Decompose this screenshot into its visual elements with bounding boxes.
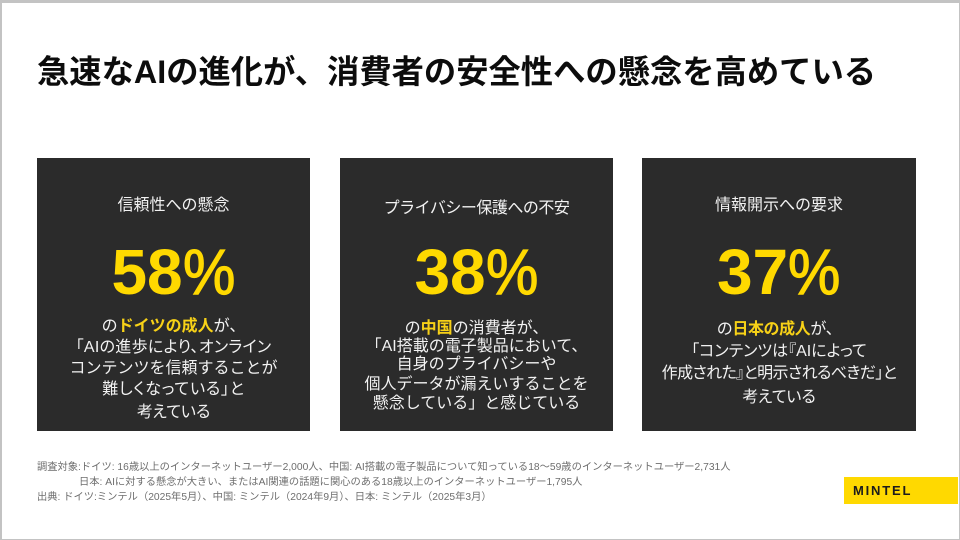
description: privacy: 自身のプライバシーや [397,356,556,373]
source notes: 出典: ドイツ:ミンテル（2025年5月）、中国: ミンテル（2024年9月）、日本: ミンテル（2025年3月） [37,492,492,503]
description: disclosure: 考えている [742,389,816,406]
panel: disclosure demand [642,158,916,431]
description: trust: 難しくなっている」と [102,381,245,398]
description: trust [69,317,278,421]
panel heading: privacy: プライバシー保護への不安 [384,200,569,217]
panel: trust concern [37,158,310,431]
description: trust: コンテンツを信頼することが [69,360,278,377]
description: disclosure: 作成された』と明示されるべきだ」と [662,365,896,382]
description: privacy [364,319,588,412]
panel heading: trust: 信頼性への懸念 [117,197,230,214]
description: privacy: 懸念している」と感じている [373,395,580,412]
statistic: 58% [111,236,235,308]
description: trust: 考えている [137,404,210,421]
description: disclosure: 「コンテンツは『AIによって [691,343,867,360]
statistic: 37% [717,236,840,308]
statistic: 58%: % [183,236,235,308]
description: trust: のドイツの成人が、 [102,318,245,335]
panel heading: disclosure: 情報開示への要求 [715,197,843,214]
description: privacy: の中国の消費者が、 [405,320,548,337]
statistic: 38% [414,236,538,308]
description: privacy: 個人データが漏えいすることを [364,376,588,393]
statistic: 37%: % [788,236,840,308]
source notes [37,461,731,503]
logo: Mintel: MINTEL [853,483,912,498]
statistic: 58%: 58 [111,236,183,308]
description: privacy: 「AI搭載の電子製品において、 [366,338,587,355]
statistic: 37%: 37 [717,236,788,308]
description: trust: 「AIの進歩により、オンライン [76,339,271,356]
description: disclosure: の日本の成人が、 [717,321,841,338]
source notes: 調査対象:ドイツ: 16歳以上のインターネットユーザー2,000人、中国: AI搭載の電子製品について知っている18～59歳のインターネットユーザー2,731人 [37,462,731,473]
logo: Mintel [844,477,958,504]
description: disclosure [662,320,896,406]
panel: privacy concern [340,158,613,431]
title: 急速なAIの進化が、消費者の安全性への懸念を高めている [37,54,876,90]
source notes: 日本: AIに対する懸念が大きい、またはAI関連の話題に関心のある18歳以上のインターネットユーザー1,795人 [79,477,582,488]
statistic: 38%: % [486,236,538,308]
statistic: 38%: 38 [414,236,486,308]
